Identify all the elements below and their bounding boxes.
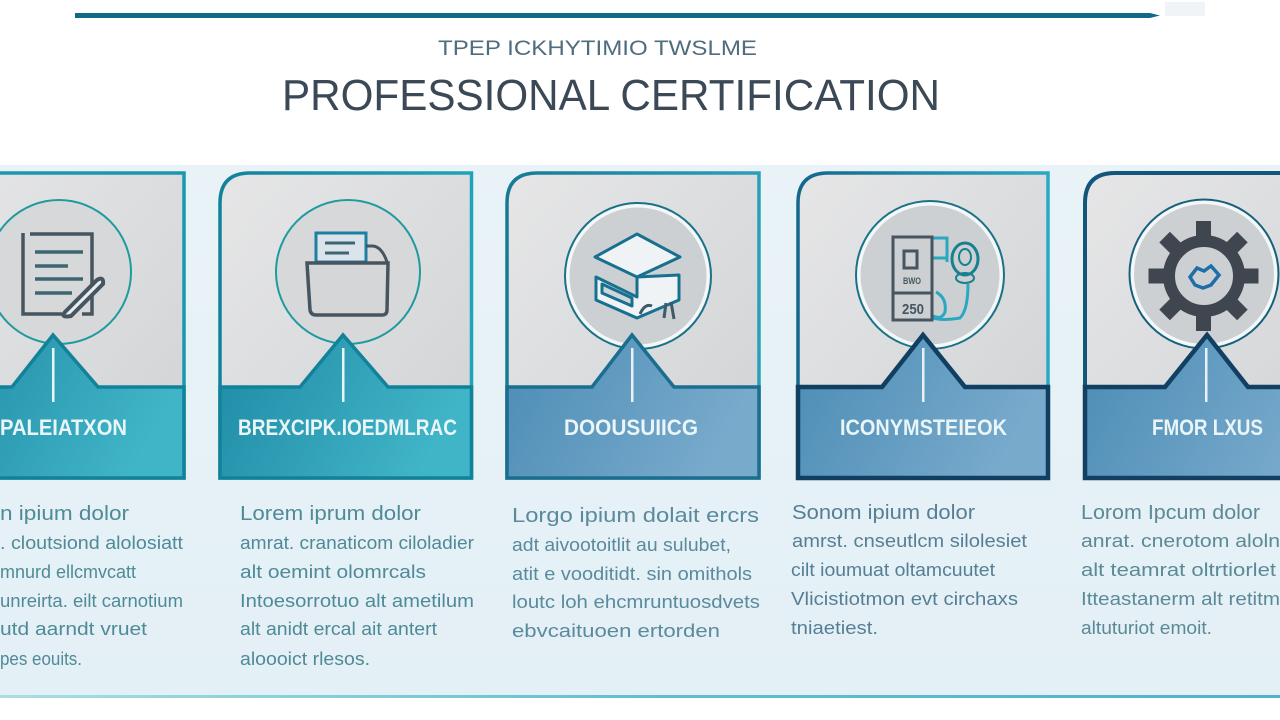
text block: column 4: Vlicistiotmon evt circhaxs: [791, 588, 1018, 609]
text block: column 1: [0, 503, 183, 669]
text block: column 5: Lorom Ipcum dolor: [1081, 502, 1260, 524]
header band: [0, 335, 184, 478]
bottom rule: [0, 695, 1280, 698]
connector: [631, 348, 634, 402]
text block: column 2: amrat. cranaticom ciloladier: [240, 532, 474, 553]
text block: column 5: [1081, 502, 1280, 638]
text block: column 3: Lorgo ipium dolait ercrs: [512, 505, 759, 527]
text block: column 4: Sonom ipium dolor: [792, 502, 975, 524]
background band: [0, 165, 1280, 696]
header band: [798, 335, 1048, 478]
connector: [922, 348, 924, 402]
card body: [220, 173, 472, 478]
text block: column 4: tniaetiest.: [791, 617, 878, 638]
label: DOOUSUIICG: [564, 415, 698, 440]
icon: device and stethoscope: [893, 237, 978, 320]
text block: column 1: mnurd ellcmvcatt: [0, 561, 136, 582]
text block: column 4: [791, 502, 1027, 638]
connector: [1205, 348, 1208, 402]
text block: column 1: unreirta. eilt carnotium: [0, 590, 183, 611]
icon circle: [855, 200, 1005, 350]
icon: graduation cap: [595, 234, 680, 319]
card body: [0, 173, 184, 478]
icon: device and stethoscope: 250: [902, 301, 924, 318]
text block: column 2: [240, 503, 474, 669]
title: PROFESSIONAL CERTIFICATION: [282, 71, 940, 120]
text block: column 3: [512, 505, 760, 641]
text block: column 5: Itteastanerm alt retitm: [1081, 588, 1280, 609]
label: BREXCIPK.IOEDMLRAC: [238, 415, 457, 440]
text block: column 2: Lorem iprum dolor: [240, 503, 421, 525]
text block: column 1: pes eouits.: [0, 648, 82, 669]
header band: [220, 335, 472, 478]
header band: [1085, 335, 1280, 478]
text block: column 2: aloooict rlesos.: [240, 648, 370, 669]
text block: column 5: alt teamrat oltrtiorlet: [1081, 559, 1276, 580]
panel: documents: [507, 173, 759, 478]
icon: device and stethoscope: BWO: [903, 276, 921, 286]
text block: column 3: ebvcaituoen ertorden: [512, 620, 720, 641]
subtitle: TPEP ICKHYTIMIO TWSLME: [438, 37, 757, 60]
text block: column 5: anrat. cnerotom aloln: [1081, 530, 1280, 551]
top rule: [75, 13, 1160, 18]
card body: [507, 173, 759, 478]
panel: renewal: [1085, 173, 1280, 478]
panel: application: [0, 173, 184, 478]
icon circle: [564, 202, 712, 350]
text block: column 2: Intoesorrotuo alt ametilum: [240, 590, 474, 611]
label: PALEIATXON: [0, 415, 127, 440]
icon: document and pen: [23, 233, 103, 316]
panel: assessment: [798, 173, 1048, 478]
header band: [507, 335, 759, 478]
text block: column 1: . cloutsiond alolosiatt: [0, 532, 183, 553]
icon circle: [276, 200, 420, 344]
text block: column 2: alt anidt ercal ait antert: [240, 618, 437, 639]
panel: prerequisites: [220, 173, 472, 478]
text block: column 5: altuturiot emoit.: [1081, 617, 1212, 638]
icon circle: [0, 200, 131, 344]
text block: column 3: atit e vooditidt. sin omithols: [512, 563, 752, 584]
connector: [342, 348, 344, 402]
connector: [52, 348, 54, 402]
card body: [1085, 173, 1280, 478]
icon: gear: [1148, 221, 1258, 331]
card body: [798, 173, 1048, 478]
text block: column 4: amrst. cnseutlcm silolesiet: [792, 530, 1027, 551]
text block: column 4: cilt ioumuat oltamcuutet: [791, 559, 995, 580]
label: FMOR LXUS: [1152, 415, 1263, 440]
text block: column 1: utd aarndt vruet: [0, 618, 147, 639]
text block: column 1: n ipium dolor: [0, 503, 129, 525]
text block: column 2: alt oemint olomrcals: [240, 561, 426, 582]
text block: column 3: loutc loh ehcmruntuosdvets: [512, 591, 760, 612]
label: ICONYMSTEIEOK: [840, 415, 1007, 440]
icon: folder: [307, 233, 388, 315]
icon circle: [1128, 198, 1280, 350]
text block: column 3: adt aivootoitlit au sulubet,: [512, 534, 731, 555]
